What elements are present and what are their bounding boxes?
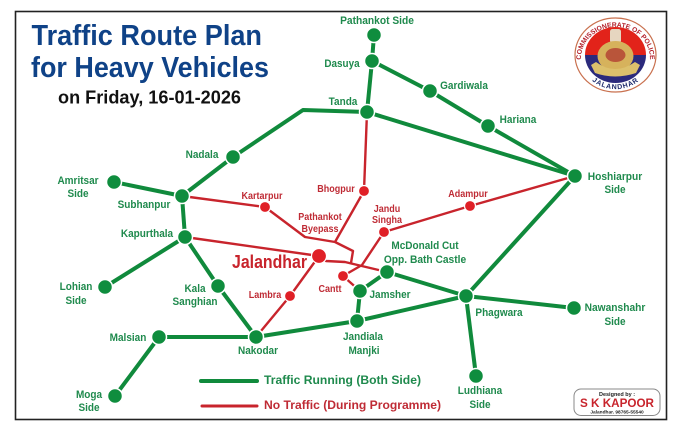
green place labels: Gardiwala: [440, 80, 488, 92]
green place labels: Manjki: [348, 345, 380, 357]
green place labels: Tanda: [329, 96, 357, 108]
green place labels: Jamsher: [369, 289, 411, 301]
red place labels: Jandu: [374, 204, 400, 215]
green place labels: Opp. Bath Castle: [384, 254, 466, 266]
green place labels: Jandiala: [343, 331, 383, 343]
designer credit box: S K KAPOOR: [580, 398, 655, 410]
police commissionerate logo: [574, 17, 657, 93]
green place labels: McDonald Cut: [391, 240, 459, 252]
logo ring text: COMMISSIONERATE OF POLICE: [576, 22, 655, 60]
legend: traffic running: Traffic Running (Both Side): [264, 373, 421, 387]
green place labels: Side: [604, 316, 626, 328]
legend: no traffic: No Traffic (During Programme): [264, 398, 441, 412]
green place labels: Hariana: [500, 114, 536, 126]
title: [31, 20, 269, 84]
green running routes: [105, 35, 575, 396]
green place labels: Kala: [184, 283, 206, 295]
green place labels: Moga: [76, 389, 102, 401]
title: for Heavy Vehicles: [31, 52, 269, 84]
green place labels: Ludhiana: [458, 385, 502, 397]
green place labels: Side: [78, 402, 100, 414]
green place labels: Side: [67, 188, 89, 200]
designer credit box: Designed by :: [599, 392, 635, 398]
red place labels: Kartarpur: [242, 191, 283, 202]
green place labels: Side: [604, 184, 626, 196]
title: Traffic Route Plan: [32, 20, 262, 52]
green route nodes: [98, 28, 582, 404]
green place labels: Phagwara: [475, 307, 523, 319]
red place labels: Lambra: [249, 290, 282, 301]
red place labels: Cantt: [319, 284, 342, 295]
green place labels: Kapurthala: [121, 228, 173, 240]
green place labels: Subhanpur: [118, 199, 170, 211]
designer credit box: Jalandhar. 98765-55540: [590, 410, 644, 416]
green place labels: Dasuya: [324, 59, 360, 70]
green place labels: Hoshiarpur: [588, 171, 642, 183]
logo bottom text: JALANDHAR: [592, 78, 638, 90]
subtitle date: on Friday, 16-01-2026: [58, 86, 241, 108]
green place labels: Side: [65, 295, 87, 307]
designer credit box: [574, 389, 660, 416]
green place labels: Lohian: [60, 281, 92, 293]
red route nodes: [260, 186, 476, 302]
red place labels: Singha: [372, 215, 403, 226]
green place labels: Amritsar: [57, 175, 99, 187]
red no-traffic routes: [182, 112, 575, 337]
green place labels: Side: [469, 399, 491, 411]
green place labels: Malsian: [110, 332, 146, 344]
city label: Jalandhar: Jalandhar: [232, 251, 307, 272]
legend: [201, 373, 441, 412]
green place labels: Sanghian: [173, 296, 217, 308]
green place labels: Pathankot Side: [340, 15, 414, 27]
red place labels: [242, 184, 488, 301]
green place labels: [57, 15, 645, 414]
green place labels: Nadala: [186, 149, 219, 161]
red place labels: Pathankot: [298, 212, 343, 223]
red place labels: Adampur: [448, 189, 488, 200]
green place labels: Nawanshahr: [585, 302, 645, 314]
red place labels: Byepass: [302, 224, 338, 235]
green place labels: Nakodar: [238, 345, 278, 357]
logo emblem: [591, 29, 640, 76]
red place labels: Bhogpur: [317, 184, 355, 195]
